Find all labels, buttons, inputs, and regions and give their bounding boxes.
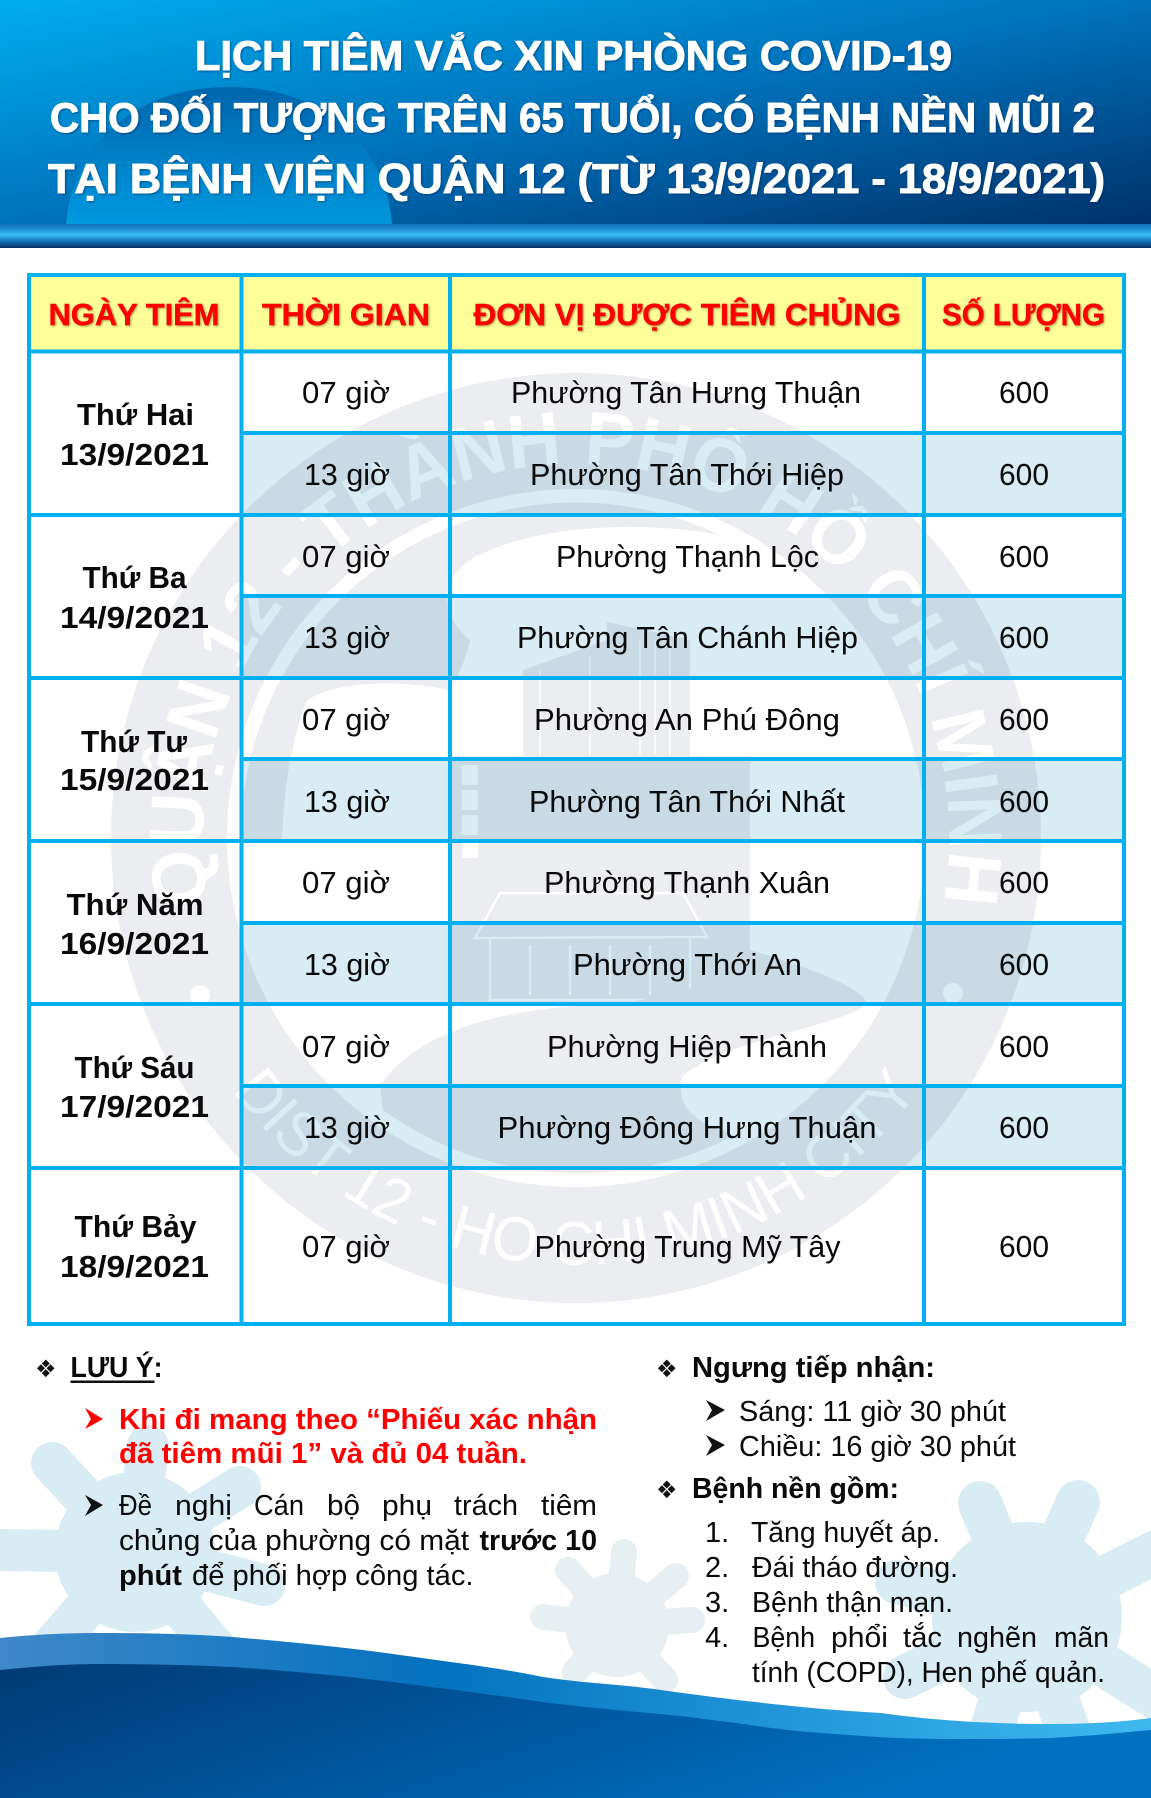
stop-receiving times: Ngưng tiếp nhận: (692, 1352, 935, 1384)
times column: 13 giờ (304, 784, 390, 819)
times column: 07 giờ (302, 1029, 390, 1064)
notes: right column (656, 1352, 1109, 1689)
request note: trách (454, 1490, 518, 1522)
notes: left column (35, 1350, 597, 1592)
times column: 13 giờ (304, 947, 390, 982)
background virus shapes (0, 1446, 1151, 1735)
underlying conditions list: 2. (705, 1552, 729, 1584)
stop-receiving times: Sáng: 11 giờ 30 phút (739, 1396, 1006, 1428)
watermark logo (111, 373, 1041, 1303)
heading: LƯU Ý: LƯU Ý: (70, 1350, 162, 1384)
request note: tiêm (541, 1490, 597, 1522)
times column: 13 giờ (304, 457, 390, 492)
icon: centre virus (543, 1552, 692, 1680)
dates column: 18/9/2021 (60, 1249, 209, 1284)
icon: left virus (0, 1446, 264, 1660)
title (48, 31, 1105, 202)
dates column: 13/9/2021 (60, 437, 209, 472)
dates column: Thứ Năm (66, 887, 204, 922)
dates column (60, 397, 209, 1284)
title: CHO ĐỐI TƯỢNG TRÊN 65 TUỔI, CÓ BỆNH NỀN MŨI 2 (50, 92, 1095, 141)
times column (302, 375, 390, 1264)
upper crescent (241, 502, 720, 840)
icon: right virus (897, 1502, 1151, 1735)
underlying conditions list: 3. (705, 1587, 729, 1619)
bottom waves (0, 1633, 1151, 1798)
times column: 07 giờ (302, 539, 390, 574)
quantity column: 600 (999, 702, 1049, 737)
request note: Cán (254, 1490, 304, 1522)
request note (85, 1490, 597, 1592)
underlying conditions list: Bệnh nền gồm: (692, 1473, 899, 1505)
dates column: Thứ Tư (81, 724, 188, 759)
title: TẠI BỆNH VIỆN QUẬN 12 (TỪ 13/9/2021 - 18/9/2021) (48, 154, 1105, 202)
dates column: 16/9/2021 (60, 926, 209, 961)
table column headings: ĐƠN VỊ ĐƯỢC TIÊM CHỦNG (474, 296, 900, 332)
times column: 07 giờ (302, 865, 390, 900)
lower swoosh (380, 950, 867, 1173)
dates column: 17/9/2021 (60, 1089, 209, 1124)
dates column: Thứ Sáu (74, 1050, 194, 1085)
quantity column (999, 375, 1049, 1264)
times column: 07 giờ (302, 702, 390, 737)
table column headings: NGÀY TIÊM (48, 296, 220, 332)
dates column: 14/9/2021 (60, 600, 209, 635)
ring dots (190, 983, 963, 1005)
request note: phụ (382, 1490, 432, 1522)
dates column: 15/9/2021 (60, 762, 209, 797)
dates column: Thứ Hai (77, 397, 194, 432)
request note: nghị (175, 1490, 232, 1522)
underlying conditions list: phổi (831, 1622, 888, 1654)
request note: bộ (327, 1490, 360, 1522)
outer ring (111, 373, 1041, 1303)
quantity column: 600 (999, 1029, 1049, 1064)
red note: đã tiêm mũi 1” và đủ 04 tuần. (119, 1438, 527, 1470)
wards column: Phường Tân Chánh Hiệp (517, 620, 858, 655)
light wave (0, 1633, 1151, 1798)
table column headings: THỜI GIAN (262, 296, 430, 332)
underlying conditions list: Đái tháo đường. (752, 1552, 958, 1584)
ring text bottom: DIST 12 - HO CHI MINH CITY (235, 1066, 908, 1266)
times column: 13 giờ (304, 1110, 390, 1145)
quantity column: 600 (999, 375, 1049, 410)
underlying conditions list: Bệnh (752, 1622, 815, 1654)
quantity column: 600 (999, 457, 1049, 492)
wards column (498, 375, 876, 1264)
red note (85, 1404, 597, 1470)
underlying conditions list: tính (COPD), Hen phế quản. (752, 1657, 1105, 1689)
request note: để phối hợp công tác. (192, 1560, 474, 1592)
quantity column: 600 (999, 1110, 1049, 1145)
dark wave (0, 1664, 1151, 1798)
underlying conditions list: tắc (903, 1621, 942, 1654)
times column: 13 giờ (304, 620, 390, 655)
dates column: Thứ Bảy (74, 1209, 197, 1244)
quantity column: 600 (999, 784, 1049, 819)
header band (0, 0, 1151, 248)
schedule table (29, 275, 1124, 1324)
heading: LƯU Ý (35, 1350, 162, 1384)
quantity column: 600 (999, 539, 1049, 574)
wards column: Phường Tân Hưng Thuận (511, 375, 861, 410)
red note: Khi đi mang theo “Phiếu xác nhận (119, 1404, 597, 1436)
wards column: Phường Thới An (573, 947, 802, 982)
stop-receiving times: ❖ (656, 1355, 678, 1383)
ring text top: QUẬN 12 - THÀNH PHỐ HỒ CHÍ MINH (142, 412, 1002, 904)
underlying conditions list: 4. (705, 1622, 729, 1654)
underlying conditions list: nghẽn (957, 1622, 1037, 1654)
underlying conditions list: Tăng huyết áp. (751, 1517, 940, 1549)
table column headings (48, 296, 1105, 332)
wards column: Phường Thạnh Xuân (544, 865, 830, 900)
alternate row shading (241, 433, 1124, 1168)
stop-receiving times (656, 1352, 1016, 1463)
dates column: Thứ Ba (82, 560, 187, 595)
wards column: Phường Trung Mỹ Tây (534, 1229, 841, 1264)
wards column: Phường Tân Thới Nhất (529, 784, 845, 819)
underlying conditions list: mãn (1054, 1622, 1109, 1654)
wards column: Phường An Phú Đông (534, 702, 840, 737)
heading: LƯU Ý: ❖ (35, 1355, 57, 1383)
underlying conditions list (656, 1473, 1109, 1689)
request note: chủng của phường có mặt (119, 1525, 469, 1557)
table column headings: SỐ LƯỢNG (942, 296, 1105, 332)
request note: phút (119, 1560, 182, 1592)
buildings (450, 622, 750, 1006)
quantity column: 600 (999, 947, 1049, 982)
wards column: Phường Tân Thới Hiệp (530, 457, 844, 492)
request note: Đề (119, 1490, 152, 1522)
wards column: Phường Đông Hưng Thuận (498, 1110, 876, 1145)
request note: trước 10 (480, 1525, 597, 1557)
decorative sphere (66, 87, 392, 224)
quantity column: 600 (999, 865, 1049, 900)
underlying conditions list: Bệnh thận mạn. (752, 1587, 953, 1619)
times column: 07 giờ (302, 1229, 390, 1264)
table header fill (29, 275, 1124, 351)
quantity column: 600 (999, 620, 1049, 655)
stop-receiving times: Chiều: 16 giờ 30 phút (739, 1431, 1016, 1463)
wards column: Phường Thạnh Lộc (556, 539, 819, 574)
underlying conditions list: ❖ (656, 1476, 678, 1504)
underlying conditions list: 1. (705, 1517, 729, 1549)
title: LỊCH TIÊM VẮC XIN PHÒNG COVID-19 (195, 31, 952, 79)
wards column: Phường Hiệp Thành (547, 1029, 827, 1064)
times column: 07 giờ (302, 375, 390, 410)
quantity column: 600 (999, 1229, 1049, 1264)
